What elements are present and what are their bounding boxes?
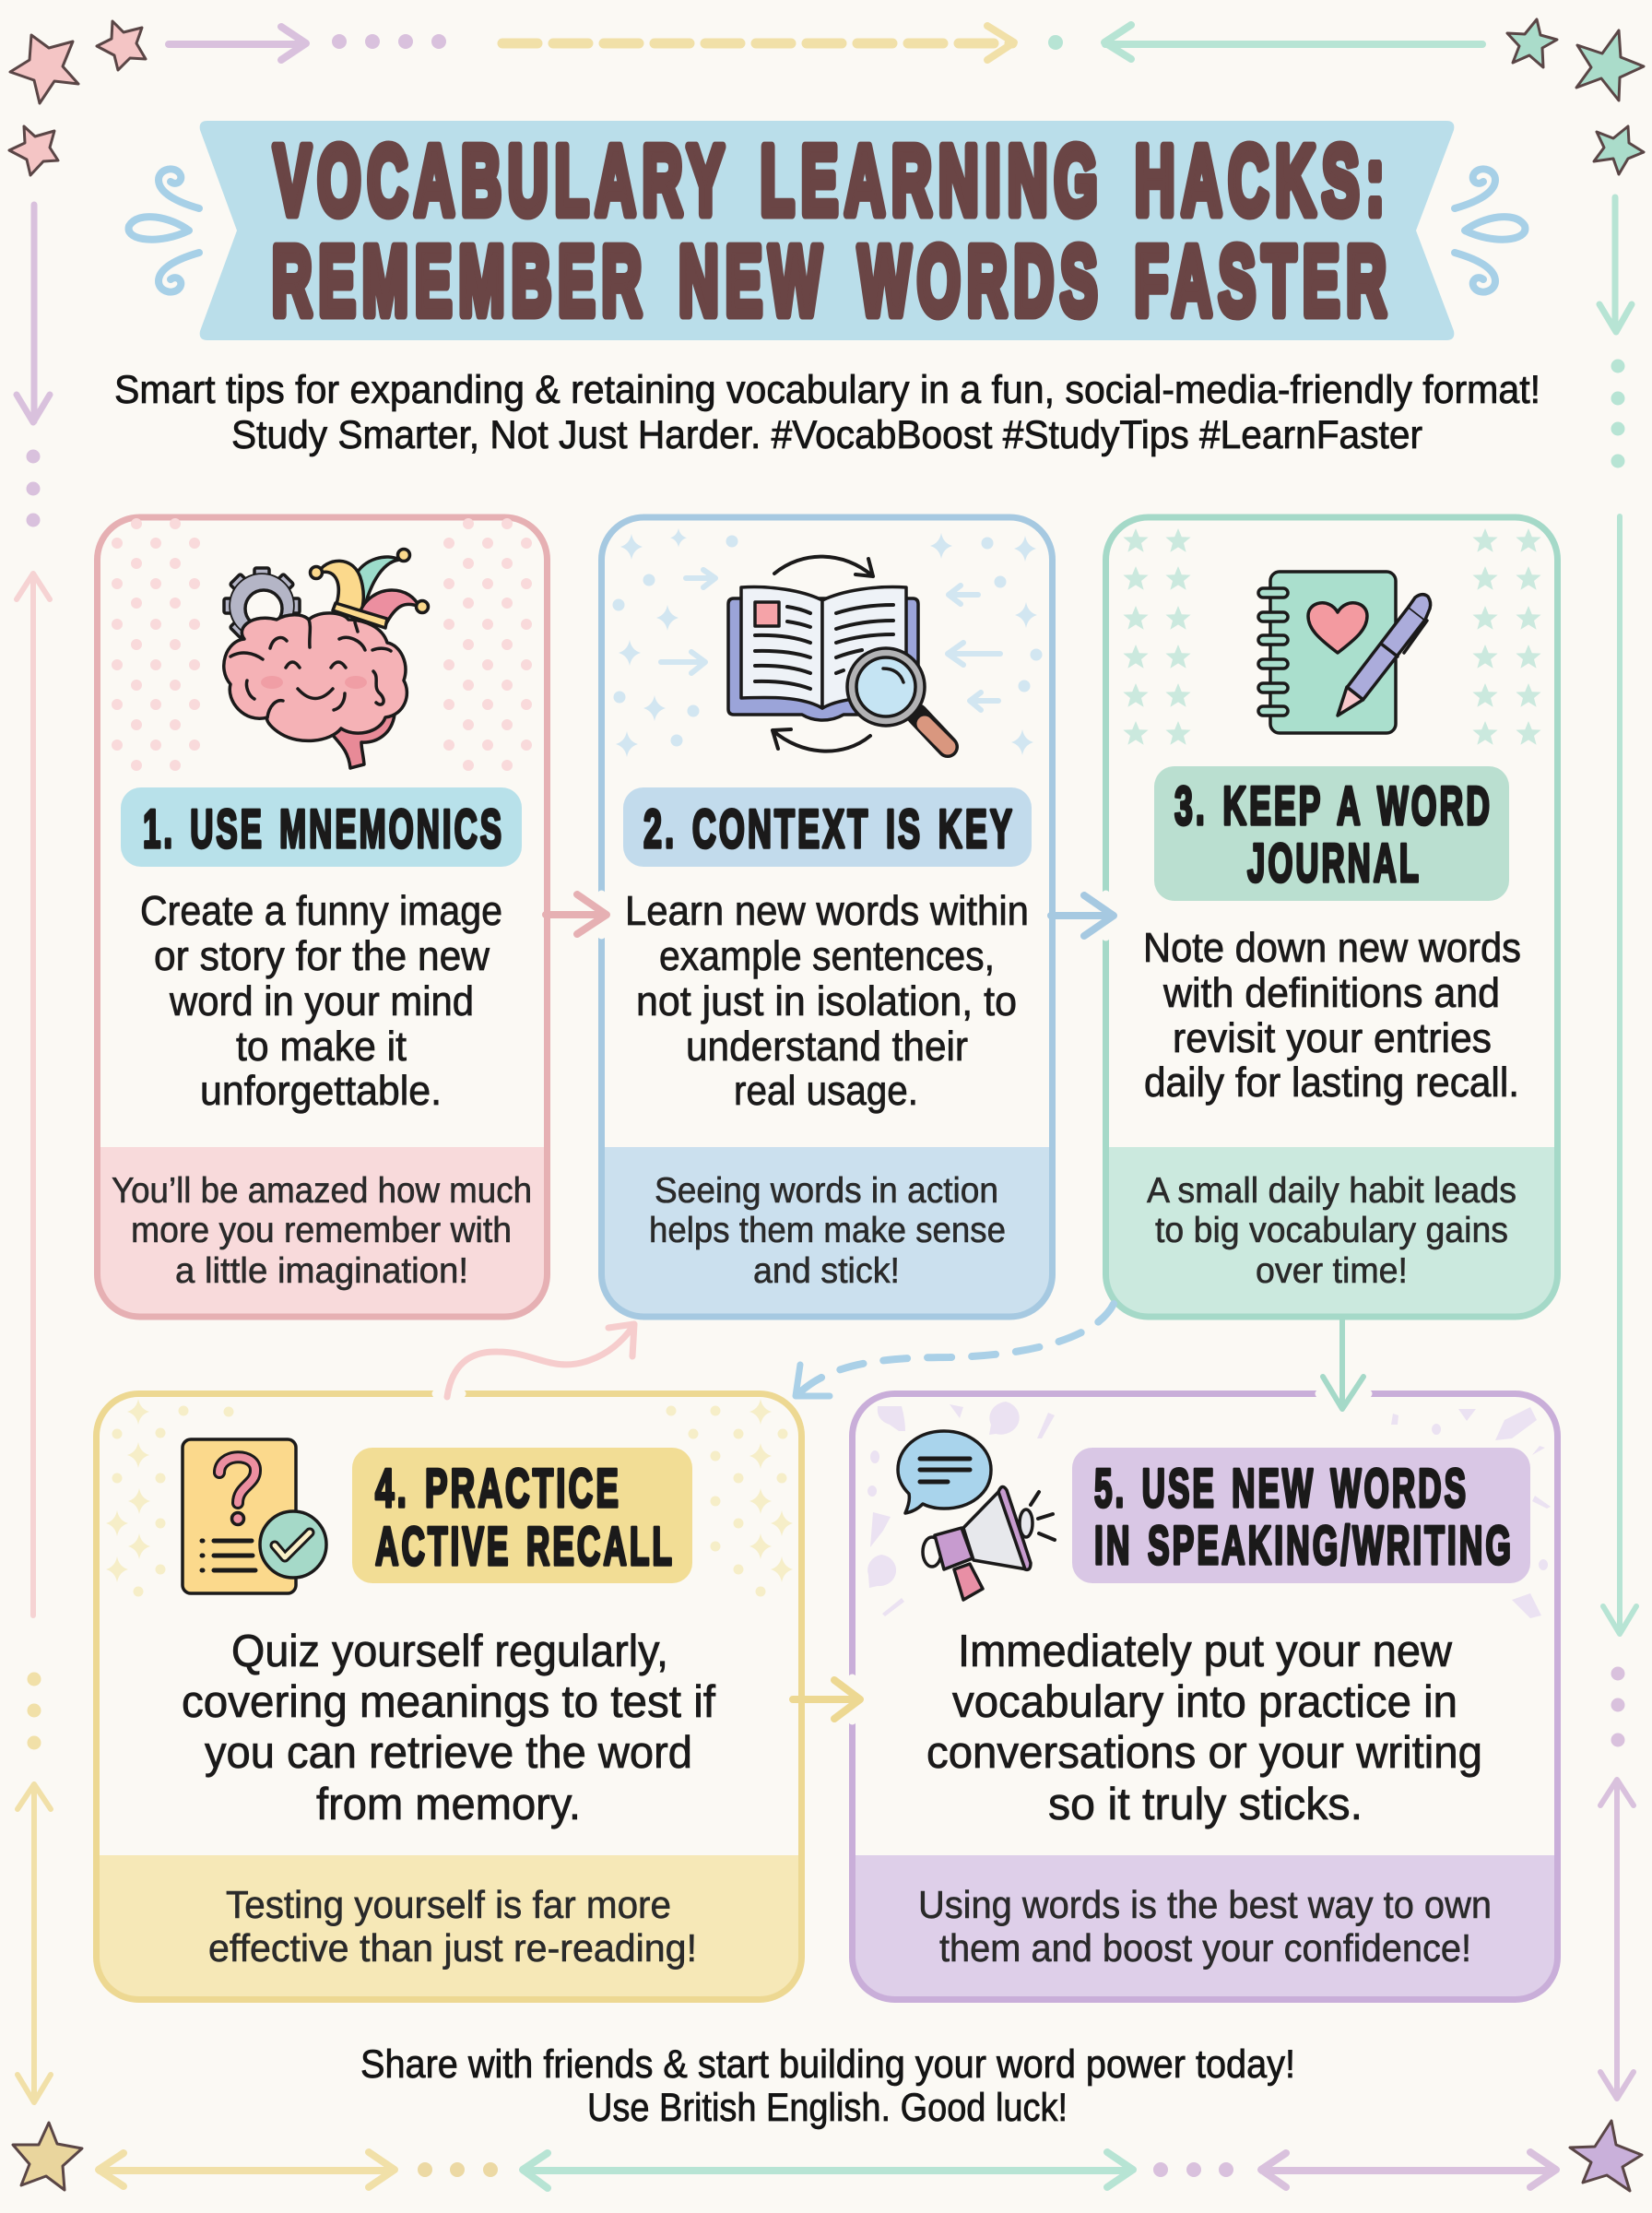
body text: from memory. xyxy=(316,1780,581,1829)
body text: Quiz yourself regularly, xyxy=(231,1627,668,1676)
body text: daily for lasting recall. xyxy=(1144,1059,1519,1106)
icon part: check badge xyxy=(260,1511,326,1578)
heading pill xyxy=(1072,1448,1530,1583)
card outline xyxy=(1106,517,1558,1317)
heading pill xyxy=(352,1448,692,1583)
icon part: notebook xyxy=(1270,572,1396,733)
icon part: speech bubble xyxy=(898,1431,991,1513)
body text: not just in isolation, to xyxy=(636,977,1017,1024)
dot pattern xyxy=(117,524,526,765)
card outline xyxy=(601,517,1053,1317)
title xyxy=(272,126,1393,336)
star pattern xyxy=(1123,528,1541,745)
decorative border: right xyxy=(1599,197,1636,2099)
body text: you can retrieve the word xyxy=(205,1728,692,1778)
icon part: pen xyxy=(1338,595,1431,716)
body text: real usage. xyxy=(734,1067,918,1114)
corner stars: top right xyxy=(1507,19,1644,174)
heading pill xyxy=(623,787,1032,867)
body text: revisit your entries xyxy=(1173,1014,1492,1061)
tip text xyxy=(649,1171,1006,1291)
doodle pattern xyxy=(867,1402,1551,1618)
icon part: hat xyxy=(310,550,428,628)
panel: 4 practice active recall xyxy=(96,1394,802,2000)
body text: example sentences, xyxy=(659,932,995,979)
body text: to make it xyxy=(236,1023,407,1070)
decorative border: left xyxy=(17,205,51,2102)
icon part: magnifier xyxy=(847,648,948,747)
footer text xyxy=(360,2042,1295,2130)
tip text: Using words is the best way to own xyxy=(918,1883,1492,1926)
body text: word in your mind xyxy=(169,977,474,1024)
tip text xyxy=(208,1883,697,1970)
panel: 5 use new words xyxy=(852,1394,1558,2000)
body text: vocabulary into practice in xyxy=(952,1677,1457,1727)
tip text xyxy=(918,1883,1492,1970)
icon part: face and folds xyxy=(230,620,391,717)
heading pill: 1. USE MNEMONICS xyxy=(143,799,504,859)
tip text: You’ll be amazed how much xyxy=(112,1171,532,1211)
tip text xyxy=(1147,1171,1516,1291)
icon part: question mark xyxy=(219,1457,255,1525)
tip text: to big vocabulary gains xyxy=(1155,1211,1508,1250)
heading pill xyxy=(1154,766,1509,901)
decorative border: bottom xyxy=(99,2152,1556,2188)
body text xyxy=(926,1627,1482,1829)
arrow: panel 2 to panel 3 xyxy=(1051,894,1114,937)
tip text: more you remember with xyxy=(131,1211,512,1250)
body text xyxy=(182,1627,715,1829)
footer text: Share with friends & start building your word power today! xyxy=(360,2042,1295,2087)
card outline xyxy=(98,517,548,1317)
subtitle xyxy=(114,368,1540,457)
panel: 1 use mnemonics xyxy=(97,517,548,1317)
card outline xyxy=(852,1394,1558,1999)
arrow: panel 4 to panel 5 xyxy=(793,1678,860,1721)
tip text: and stick! xyxy=(753,1251,900,1291)
arrow: panel 3 to panel 5 xyxy=(1319,1319,1368,1409)
icon part: brain xyxy=(224,613,407,740)
icon: open book with magnifying glass xyxy=(728,557,948,751)
card band xyxy=(601,1147,1053,1317)
arrow: panel 4 to panel 2 curved xyxy=(436,1324,634,1397)
corner stars: top left xyxy=(9,21,146,175)
swirl ornament: right xyxy=(1455,169,1525,292)
icon: notebook and pen xyxy=(1258,572,1431,733)
icon part: cycle arrows xyxy=(773,557,873,751)
panel: 2 context is key xyxy=(601,517,1053,1317)
icon part: brain stem xyxy=(331,715,395,768)
sparkle pattern xyxy=(616,528,1037,757)
corner star: bottom right xyxy=(1570,2121,1642,2191)
icon part: list lines xyxy=(202,1541,255,1570)
tip text: helps them make sense xyxy=(649,1211,1006,1250)
panel: 3 keep a word journal xyxy=(1105,517,1558,1317)
card band xyxy=(852,1855,1558,2000)
tip text: A small daily habit leads xyxy=(1147,1171,1516,1211)
body text xyxy=(625,887,1029,1114)
body text: with definitions and xyxy=(1162,969,1500,1016)
heading pill: 4. PRACTICE xyxy=(375,1458,621,1519)
tip text: effective than just re-reading! xyxy=(208,1926,697,1970)
corner star: bottom left xyxy=(13,2123,82,2190)
card band xyxy=(97,1147,548,1317)
subtitle: Study Smarter, Not Just Harder. #VocabBoost #StudyTips #LearnFaster xyxy=(231,413,1422,457)
body text xyxy=(140,887,502,1114)
swirl ornament: left xyxy=(129,169,199,292)
heading pill: ACTIVE RECALL xyxy=(375,1516,675,1577)
body text: conversations or your writing xyxy=(926,1728,1482,1778)
icon part: sheet xyxy=(183,1439,296,1593)
icon part: cover xyxy=(728,598,918,720)
arrow: panel 3 to panel 4 dashed xyxy=(796,1304,1114,1396)
heading pill xyxy=(121,787,522,867)
card band xyxy=(1105,1147,1558,1317)
tip text: over time! xyxy=(1256,1251,1408,1291)
icon part: pages xyxy=(741,587,906,708)
icon part: megaphone xyxy=(923,1486,1032,1600)
sparkle pattern xyxy=(106,1399,793,1592)
icon part: heart xyxy=(1308,603,1367,653)
body text: so it truly sticks. xyxy=(1048,1780,1363,1829)
tip text: a little imagination! xyxy=(175,1251,468,1291)
body text: Create a funny image xyxy=(140,887,502,934)
card band xyxy=(96,1855,802,2000)
card outline xyxy=(96,1394,802,1999)
tip text: Seeing words in action xyxy=(655,1171,998,1211)
tip text xyxy=(112,1171,532,1291)
icon: brain with jester hat xyxy=(224,550,428,768)
subtitle: Smart tips for expanding & retaining vocabulary in a fun, social-media-friendly format! xyxy=(114,368,1540,412)
icon part: gear xyxy=(224,568,300,644)
heading pill: 2. CONTEXT IS KEY xyxy=(643,799,1015,859)
body text xyxy=(1143,924,1521,1106)
body text: Learn new words within xyxy=(625,887,1029,934)
body text: understand their xyxy=(686,1023,968,1070)
heading pill: JOURNAL xyxy=(1247,833,1422,893)
arrow: panel 1 to panel 2 xyxy=(546,894,607,935)
decorative border: top xyxy=(169,25,1482,60)
body text: or story for the new xyxy=(154,932,490,979)
body text: Immediately put your new xyxy=(958,1627,1453,1676)
body text: covering meanings to test if xyxy=(182,1677,715,1727)
tip text: Testing yourself is far more xyxy=(226,1883,671,1926)
title banner xyxy=(200,121,1454,340)
body text: Note down new words xyxy=(1143,924,1521,971)
icon part: text lines xyxy=(755,605,893,689)
icon: quiz sheet with check xyxy=(183,1439,326,1593)
tip text: them and boost your confidence! xyxy=(939,1926,1471,1970)
footer text: Use British English. Good luck! xyxy=(587,2086,1068,2130)
icon part: rings xyxy=(1258,588,1288,716)
icon: speech bubble and megaphone xyxy=(898,1431,1055,1600)
body text: unforgettable. xyxy=(200,1067,442,1114)
